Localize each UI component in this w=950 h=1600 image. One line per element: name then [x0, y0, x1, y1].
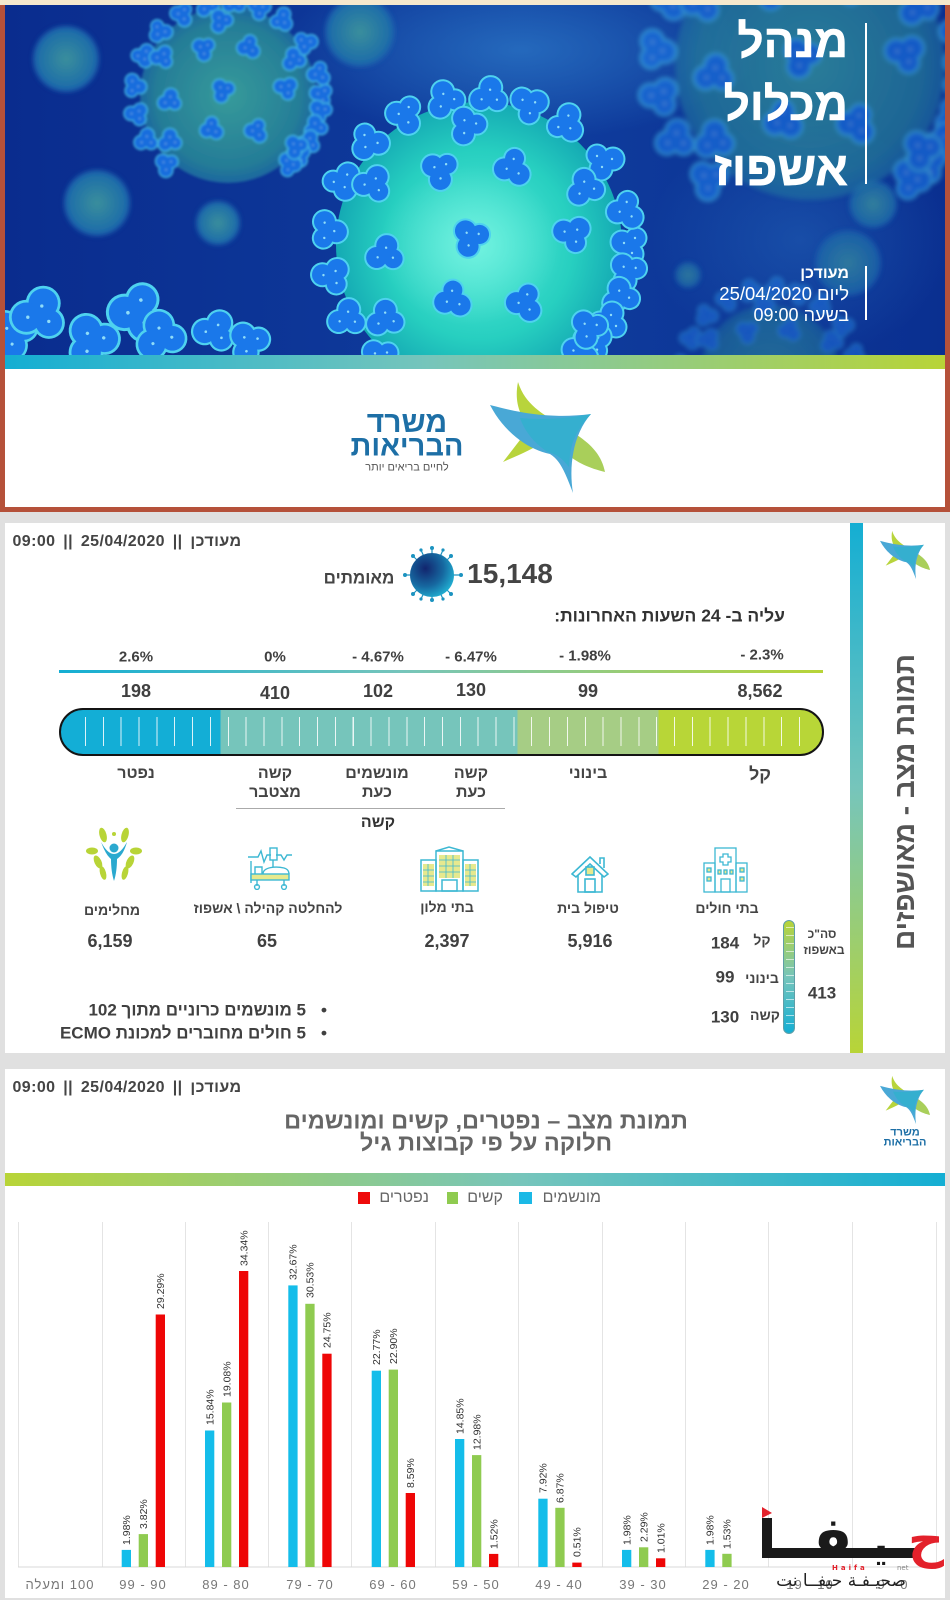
logo text: משרד הבריאות: לחיים בריאים יותר	[365, 462, 449, 474]
severe bracket	[236, 808, 505, 833]
group 80-89	[204, 1230, 250, 1567]
group 20-29: 1.98%	[705, 1515, 717, 1545]
update stamp on the cover: מעודכן	[800, 265, 849, 282]
facility values: 5,916	[567, 931, 613, 951]
age axis labels: 49 - 40	[535, 1577, 583, 1592]
age axis labels: 100 ומעלה	[26, 1577, 94, 1592]
icon: hotel	[420, 846, 479, 892]
facility labels: מחלימים	[84, 902, 140, 918]
group 90-99: 3.82%	[138, 1499, 150, 1529]
group 30-39	[621, 1512, 667, 1567]
legend item: deceased	[358, 1189, 429, 1206]
group 70-79	[288, 1244, 334, 1567]
severity labels: בינוני	[569, 765, 607, 782]
hospitalised breakdown: סה"כ	[808, 927, 836, 941]
confirmed cases count	[324, 546, 553, 602]
hospitalised breakdown	[711, 927, 845, 1026]
group 60-69	[371, 1328, 417, 1567]
facility labels	[84, 899, 759, 918]
age axis labels: 79 - 70	[286, 1577, 334, 1592]
group 90-99	[121, 1273, 167, 1567]
facility labels: בתי חולים	[695, 900, 759, 916]
group 20-29	[705, 1515, 734, 1567]
group 70-79: 30.53%	[305, 1262, 317, 1298]
count row	[121, 680, 783, 703]
severity labels: מצטבר	[249, 784, 301, 801]
count row: 130	[456, 680, 486, 700]
facility values: 2,397	[424, 931, 470, 951]
age axis labels	[26, 1577, 909, 1592]
watermark: Haifa net: Haifa	[832, 1564, 868, 1572]
gradient strip under hero	[5, 355, 945, 369]
severity labels: כעת	[362, 784, 392, 801]
group 40-49	[538, 1463, 584, 1567]
count row: 410	[260, 683, 290, 703]
vertical gradient bar	[850, 523, 863, 1053]
percent change row	[119, 646, 784, 666]
group 50-59	[454, 1398, 500, 1567]
logo text: משרד הבריאות: משרד	[367, 406, 447, 439]
severity labels: קל	[749, 764, 771, 784]
age axis labels: 19 - 10	[786, 1577, 834, 1592]
hospitalised breakdown: 99	[716, 968, 734, 986]
severity labels: קשה	[258, 765, 292, 782]
bullet notes: •	[321, 1024, 327, 1042]
count row: 198	[121, 681, 151, 701]
hospitalised breakdown: קשה	[750, 1007, 780, 1023]
group 40-49: 0.51%	[572, 1527, 584, 1557]
group 90-99: 1.98%	[121, 1515, 133, 1545]
facility values: 65	[257, 931, 277, 951]
facility values	[87, 931, 613, 951]
watermark: Haifa net	[762, 1504, 944, 1591]
gradient divider line	[59, 670, 823, 673]
update stamp on the cover	[719, 265, 849, 325]
bullet notes	[60, 1000, 327, 1042]
top cream strip	[0, 0, 950, 5]
legend item: ventilated: מונשמים	[543, 1189, 601, 1206]
hero image: coronavirus illustration	[5, 5, 945, 355]
icon: hospital bed	[248, 847, 292, 890]
watermark: Haifa net: ـيـ	[857, 1519, 905, 1568]
small logo star	[880, 531, 930, 579]
group 20-29: 1.53%	[722, 1519, 734, 1549]
number: confirmed: 15,148	[467, 558, 553, 589]
bullet notes: •	[321, 1000, 327, 1020]
legend item: deceased: נפטרים	[379, 1189, 429, 1206]
facility values: 6,159	[87, 931, 133, 951]
icon: house	[571, 856, 609, 893]
chart title	[284, 1107, 688, 1155]
title: מנהל מכלול אשפוז: מכלול	[724, 78, 848, 130]
legend item: severe	[447, 1189, 503, 1206]
subheading: rise in last 24 hours: עליה ב- 24 השעות האחרונות:	[554, 605, 785, 625]
hospitalised breakdown: באשפוז	[803, 943, 845, 957]
logo text: משרד הבריאות	[351, 406, 463, 474]
group 50-59: 1.52%	[488, 1519, 500, 1549]
icon: hospital	[703, 847, 748, 893]
age axis labels: 9 - 0	[877, 1577, 909, 1592]
title: מנהל מכלול אשפוז: מנהל	[737, 15, 848, 67]
severity labels: נפטר	[117, 765, 155, 782]
update stamp on the cover: בשעה 09:00	[754, 305, 849, 325]
watermark: Haifa net: ـفـ	[792, 1504, 875, 1572]
update stamp: מעודכן || 25/04/2020 || 09:00	[12, 533, 242, 550]
group 50-59: 12.98%	[471, 1414, 483, 1450]
group 60-69: 22.90%	[388, 1328, 400, 1364]
percent change row: - 6.47%	[445, 648, 497, 666]
percent change row: 2.6%	[119, 648, 153, 666]
group 60-69: 8.59%	[405, 1458, 417, 1488]
age axis labels: 39 - 30	[619, 1577, 667, 1592]
logo with ministry name: הבריאות	[884, 1136, 926, 1148]
severe bracket: קשה	[361, 814, 395, 831]
thermometer severity bar	[59, 708, 824, 756]
severity labels: מונשמים	[345, 765, 409, 782]
hospitalised breakdown: בינוני	[745, 970, 779, 986]
panel: cover banner	[0, 5, 950, 512]
percent change row: - 4.67%	[352, 648, 404, 666]
group 70-79: 24.75%	[322, 1312, 334, 1348]
count row: 102	[363, 681, 393, 701]
icon: recovered person tree	[86, 828, 142, 881]
group 80-89: 15.84%	[204, 1389, 216, 1425]
severity labels: קשה	[454, 765, 488, 782]
facility labels: טיפול בית	[557, 900, 619, 916]
age axis labels: 29 - 20	[702, 1577, 750, 1592]
logo with ministry name: משרד	[890, 1126, 920, 1138]
percent change row: - 2.3%	[740, 646, 784, 664]
icon: virus	[403, 546, 463, 602]
bullet notes: 5 חולים מחוברים למכונת ECMO	[60, 1024, 306, 1042]
legend item: severe: קשים	[467, 1189, 503, 1206]
severity labels: כעת	[456, 784, 486, 801]
update stamp: מעודכן || 25/04/2020 || 09:00	[12, 1079, 242, 1096]
bar chart: share by age group	[18, 1222, 937, 1592]
count row: 8,562	[737, 681, 783, 701]
group 80-89: 19.08%	[221, 1361, 233, 1397]
severity labels	[117, 764, 771, 801]
group 40-49: 6.87%	[555, 1473, 567, 1503]
count row: 99	[578, 681, 598, 701]
vertical heading: תמונת מצב - מאושפזים	[889, 654, 920, 950]
bullet notes: 5 מונשמים כרוניים מתוך 102	[88, 1000, 306, 1020]
age axis labels: 99 - 90	[119, 1577, 167, 1592]
label: confirmed: מאומתים	[324, 568, 394, 588]
age axis labels: 69 - 60	[369, 1577, 417, 1592]
percent change row: 0%	[264, 648, 286, 666]
group 40-49: 7.92%	[538, 1463, 550, 1493]
legend	[358, 1189, 601, 1206]
logo with ministry name	[880, 1076, 930, 1148]
hospitalised breakdown: 413	[808, 984, 836, 1002]
facility labels: להחלטה קהילה \ אשפוז	[194, 900, 342, 916]
logo text: משרד הבריאות: הבריאות	[351, 430, 463, 462]
watermark: Haifa net: صحيـفـة حيفــا نت	[776, 1571, 906, 1591]
group 90-99: 29.29%	[155, 1273, 167, 1309]
small thermometer	[783, 920, 795, 1034]
title: מנהל מכלול אשפוז: אשפוז	[714, 143, 848, 196]
update stamp on the cover: ליום 25/04/2020	[719, 283, 849, 304]
hospitalised breakdown: 184	[711, 934, 739, 952]
chart title: תמונת מצב – נפטרים, קשים ומונשמים	[284, 1107, 688, 1133]
gradient strip	[5, 1173, 945, 1186]
group 30-39: 1.98%	[621, 1515, 633, 1545]
hospitalised breakdown: 130	[711, 1008, 739, 1026]
percent change row: - 1.98%	[559, 648, 611, 664]
group 50-59: 14.85%	[454, 1398, 466, 1434]
watermark: Haifa net: ح	[908, 1511, 944, 1569]
group 80-89: 34.34%	[238, 1230, 250, 1266]
age axis labels: 59 - 50	[452, 1577, 500, 1592]
hospitalised breakdown: קל	[753, 932, 771, 948]
group 30-39: 1.01%	[655, 1523, 667, 1553]
panel: age breakdown	[5, 1069, 945, 1598]
watermark: Haifa net: net	[897, 1564, 909, 1572]
group 30-39: 2.29%	[638, 1512, 650, 1542]
group 60-69: 22.77%	[371, 1329, 383, 1365]
age axis labels: 89 - 80	[202, 1577, 250, 1592]
panel: hospitalisation status	[5, 523, 945, 1053]
facility labels: בתי מלון	[420, 899, 474, 915]
chart title: חלוקה על פי קבוצות גיל	[360, 1129, 612, 1155]
logo: ministry of health star	[490, 382, 605, 493]
title: מנהל מכלול אשפוז	[714, 15, 848, 196]
group 70-79: 32.67%	[288, 1244, 300, 1280]
